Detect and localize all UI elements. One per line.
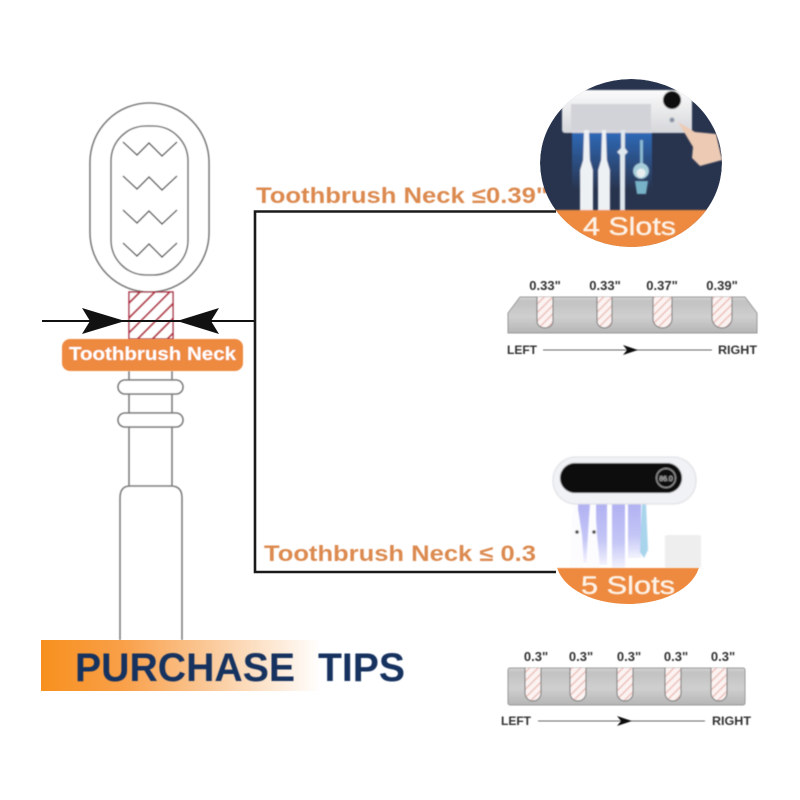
dispenser: [562, 90, 692, 133]
connector lines: [255, 212, 556, 572]
slot plate: [508, 668, 745, 705]
direction arrow: LEFT: [501, 716, 531, 728]
hand: [678, 122, 722, 166]
label: 4 slots: 4 Slots: [583, 213, 676, 241]
slot values: 0.33": [529, 278, 561, 293]
toothbrush stem: [120, 371, 182, 640]
slot values: [524, 649, 735, 664]
slot values: 0.3": [524, 649, 548, 664]
bristle zigzags: [123, 142, 177, 257]
toothbrush head: [90, 103, 209, 292]
toothbrushes: [580, 130, 593, 210]
blue glow: [572, 130, 652, 190]
monkey toothbrush: [633, 140, 649, 194]
direction arrow: LEFT: [507, 345, 537, 357]
slot values: 0.3": [617, 649, 641, 664]
panel: 4 slot sizes: [507, 278, 757, 357]
slots: [537, 297, 732, 328]
slot values: 0.3": [569, 649, 593, 664]
orange band: [555, 209, 707, 247]
banner text: [75, 646, 405, 690]
direction arrow: RIGHT: [718, 345, 757, 357]
dispenser: [553, 457, 696, 504]
toothbrush outline: [90, 103, 209, 640]
slot values: 0.39": [706, 278, 738, 293]
banner text: TIPS: [318, 646, 405, 690]
slot values: 0.3": [664, 649, 688, 664]
panel: 5 slot sizes: [501, 649, 751, 728]
photo: 5 slots sterilizer: 86.0: [659, 476, 673, 483]
slot plate: [508, 297, 757, 333]
hatched neck: [129, 292, 173, 339]
uv beams and brushes: [570, 503, 648, 568]
cup: [665, 535, 701, 568]
banner background: [41, 640, 321, 691]
slot values: 0.37": [646, 278, 678, 293]
slot values: [529, 278, 738, 293]
direction arrow: [501, 716, 751, 728]
photo: 4 slots sterilizer: [540, 79, 722, 250]
measurement arrows: [42, 308, 255, 334]
orange band: 5 slots: [557, 567, 699, 604]
label: toothbrush neck: Toothbrush Neck: [69, 344, 237, 364]
slot values: 0.33": [589, 278, 621, 293]
heading: 5 slots neck size: Toothbrush Neck ≤ 0.3: [264, 541, 536, 566]
slot values: 0.3": [711, 649, 735, 664]
direction arrow: [507, 345, 757, 357]
slots: [525, 668, 727, 701]
toothbrush rings: [118, 380, 183, 427]
banner: purchase tips: [41, 640, 405, 691]
label: toothbrush neck: [62, 339, 243, 371]
direction arrow: RIGHT: [712, 716, 751, 728]
heading: 4 slots neck size: Toothbrush Neck ≤0.39": [256, 183, 548, 208]
label: 5 slots: 5 Slots: [581, 572, 675, 600]
photo: 5 slots sterilizer: [553, 457, 701, 568]
banner text: PURCHASE: [75, 646, 295, 690]
